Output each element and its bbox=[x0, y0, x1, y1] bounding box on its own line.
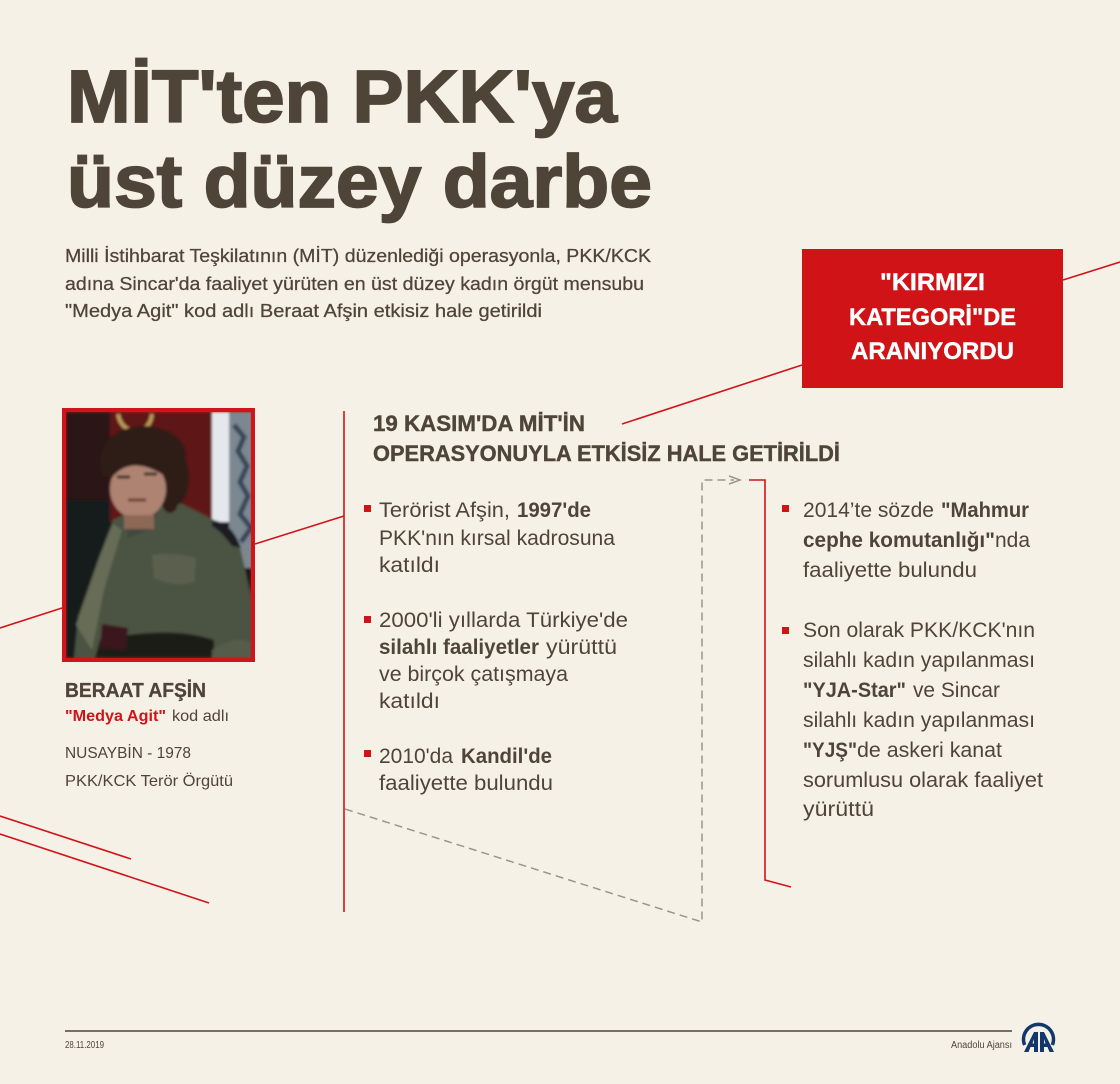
right column bullet: last role: sorumlusu olarak faaliyet bbox=[803, 769, 1043, 792]
left column bullet: 2000s bbox=[364, 609, 628, 713]
right column bullet: last role: Son olarak PKK/KCK'nın bbox=[803, 619, 1035, 642]
right column bullet: last role: silahlı kadın yapılanması bbox=[803, 709, 1035, 732]
right column bullet: last role bbox=[782, 619, 1043, 821]
right column bullet: last role: ve Sincar bbox=[913, 679, 1000, 702]
callout: red category box: ARANIYORDU bbox=[851, 338, 1014, 365]
right column bullet: last role: de askeri kanat bbox=[857, 739, 1002, 762]
right column bullet: 2014: 2014’te sözde bbox=[803, 499, 934, 522]
title: üst düzey darbe bbox=[67, 140, 652, 223]
section heading: OPERASYONUYLA ETKİSİZ HALE GETİRİLDİ bbox=[373, 441, 840, 466]
left column bullet: 1997: Terörist Afşin, bbox=[379, 499, 510, 522]
left column bullet: 1997 bbox=[364, 499, 615, 577]
left column bullet: 2000s: 2000'li yıllarda Türkiye'de bbox=[379, 609, 628, 632]
left column bullet: 1997: katıldı bbox=[379, 554, 440, 577]
left column bullet: 1997: PKK'nın kırsal kadrosuna bbox=[379, 527, 615, 550]
person details: "Medya Agit" bbox=[65, 708, 166, 725]
left column bullet: 2010: Kandil'de bbox=[461, 745, 552, 768]
callout: red category box bbox=[802, 249, 1063, 388]
right column bullet: last role: "YJŞ" bbox=[803, 739, 857, 762]
photo: Beraat Afşin portrait bbox=[62, 408, 255, 662]
intro text: Milli İstihbarat Teşkilatının (MİT) düzenlediği operasyonla, PKK/KCK bbox=[65, 245, 652, 266]
section heading: 19 KASIM'DA MİT'İN bbox=[373, 411, 585, 436]
callout: red category box: KATEGORİ"DE bbox=[849, 304, 1016, 331]
left column bullet: 1997: 1997'de bbox=[517, 499, 591, 522]
callout: red category box: "KIRMIZI bbox=[880, 269, 985, 296]
footer source: Anadolu Ajansı bbox=[951, 1040, 1012, 1051]
right column bullet: 2014: nda bbox=[995, 529, 1030, 552]
intro text: adına Sincar'da faaliyet yürüten en üst düzey kadın örgüt mensubu bbox=[65, 273, 644, 294]
dashed arrow connector bbox=[345, 476, 740, 922]
person details: BERAAT AFŞİN bbox=[65, 679, 206, 702]
icon: Anadolu Ajansı logo bbox=[1023, 1024, 1054, 1052]
footer date: 28.11.2019 bbox=[65, 1040, 104, 1051]
title bbox=[67, 55, 652, 223]
person details: kod adlı bbox=[172, 708, 229, 725]
right column bullet: 2014 bbox=[782, 499, 1030, 582]
title: MİT'ten PKK'ya bbox=[67, 55, 618, 138]
left column bullet: 2010: faaliyette bulundu bbox=[379, 772, 553, 795]
left column bullet: 2000s: yürüttü bbox=[546, 636, 617, 659]
right column bullet: last role: "YJA-Star" bbox=[803, 679, 906, 702]
connector lines: red diagonals bbox=[0, 262, 1120, 912]
right column bullet: last role: yürüttü bbox=[803, 798, 874, 821]
footer rule bbox=[65, 1030, 1012, 1032]
person details bbox=[65, 679, 233, 790]
right column bullet: 2014: cephe komutanlığı" bbox=[803, 529, 995, 552]
right column bullet: last role: silahlı kadın yapılanması bbox=[803, 649, 1035, 672]
person details: NUSAYBİN - 1978 bbox=[65, 743, 191, 762]
left column bullet: 2010: 2010'da bbox=[379, 745, 453, 768]
person details: PKK/KCK Terör Örgütü bbox=[65, 772, 233, 790]
intro text bbox=[65, 245, 652, 321]
intro text: "Medya Agit" kod adlı Beraat Afşin etkisiz hale getirildi bbox=[65, 300, 542, 321]
left column bullet: 2000s: katıldı bbox=[379, 690, 440, 713]
right column bullet: 2014: "Mahmur bbox=[941, 499, 1029, 522]
section heading bbox=[373, 411, 840, 466]
left column bullet: 2000s: silahlı faaliyetler bbox=[379, 636, 539, 659]
left column bullet: 2010 bbox=[364, 745, 553, 795]
left column bullet: 2000s: ve birçok çatışmaya bbox=[379, 663, 568, 686]
red bracket bbox=[749, 480, 791, 887]
right column bullet: 2014: faaliyette bulundu bbox=[803, 559, 977, 582]
